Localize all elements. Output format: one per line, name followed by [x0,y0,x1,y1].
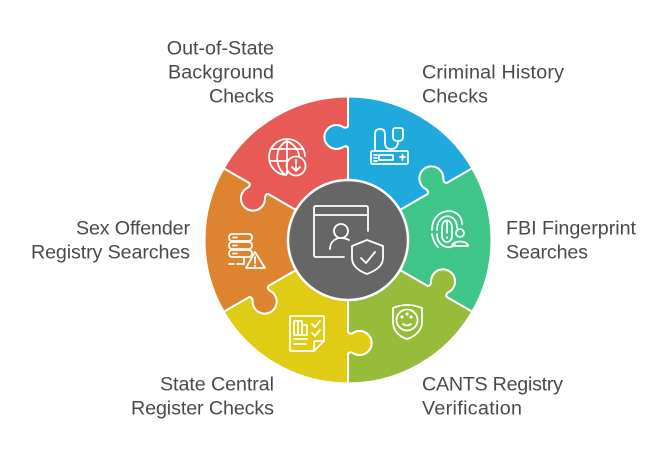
label: state central register checks: Register Checks [131,398,274,420]
label: sex offender registry searches: Registry Searches [31,242,190,264]
label: FBI fingerprint searches: FBI Fingerprint [506,218,637,240]
icon: globe with download [269,139,306,176]
label: out-of-state background checks: Checks [209,86,274,108]
puzzle piece: sex offender registry [162,147,334,332]
label: state central register checks [131,374,274,420]
label: criminal history checks: Checks [422,86,488,108]
icon: profile window with shield [314,206,383,274]
label: criminal history checks: Criminal History [422,62,564,84]
label: FBI fingerprint searches [506,218,637,264]
puzzle piece: FBI fingerprint [362,148,534,333]
icon: checklist document [290,316,324,351]
label: FBI fingerprint searches: Searches [506,242,588,264]
label: CANTS registry verification [422,374,563,420]
icon: radio device with microphone [371,128,408,164]
label: CANTS registry verification: CANTS Registry [422,374,563,396]
puzzle piece: criminal history [324,96,472,210]
icon: servers with warning triangle [229,234,265,268]
label: state central register checks: State Central [160,374,274,396]
label: out-of-state background checks: Out-of-State [167,38,274,60]
label: sex offender registry searches [31,218,190,264]
puzzle piece: state central register [224,270,372,384]
label: sex offender registry searches: Sex Offender [76,218,190,240]
puzzle piece: CANTS registry [312,235,484,419]
icon: fingerprint with person [432,211,468,247]
icon: shield with smiling face [393,305,422,339]
label: criminal history checks [422,62,564,108]
center circle [288,180,408,300]
puzzle piece: out-of-state [212,61,384,245]
label: CANTS registry verification: Verification [422,398,522,420]
label: out-of-state background checks [167,38,274,108]
label: out-of-state background checks: Background [168,62,274,84]
